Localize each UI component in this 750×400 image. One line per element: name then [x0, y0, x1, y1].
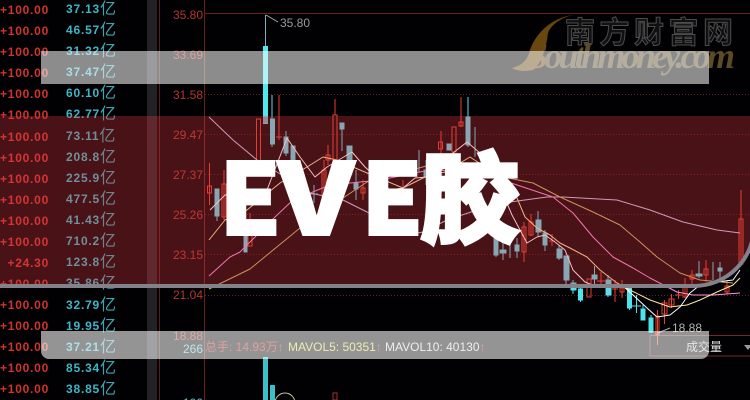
column: turnover list: 710.2亿 — [66, 227, 116, 251]
axis labels — [173, 8, 203, 343]
axis labels: 23.15 — [173, 248, 203, 262]
column: price change list: +100.00 — [0, 340, 49, 354]
column: price change list: +100.00 — [0, 193, 49, 207]
legend text on bottom band: 总手: 14.93万↑ — [205, 340, 284, 354]
column: price change list: +100.00 — [0, 130, 49, 144]
column: price change list: +100.00 — [0, 361, 49, 375]
column: price change list: +100.00 — [0, 151, 49, 165]
column: turnover list: 35.86亿 — [66, 269, 116, 293]
column: turnover list: 19.95亿 — [66, 312, 116, 336]
column: turnover list: 73.11亿 — [66, 122, 115, 146]
title: 胶 — [420, 120, 519, 264]
column: price change list: +100.00 — [0, 108, 49, 122]
column: turnover list: 123.8亿 — [66, 248, 116, 272]
title: E — [219, 120, 281, 264]
axis labels: 21.04 — [173, 288, 203, 302]
column: turnover list: 208.8亿 — [66, 143, 116, 167]
legend text on bottom band — [183, 340, 750, 356]
column: price change list: +100.00 — [0, 235, 49, 249]
column: price change list: +100.00 — [0, 45, 49, 59]
column: price change list: +100.00 — [0, 172, 49, 186]
column: price change list: +100.00 — [0, 214, 49, 228]
column: price change list: +100.00 — [0, 66, 49, 80]
volume bars — [183, 357, 337, 400]
axis labels: 29.47 — [173, 128, 203, 142]
low price marker: 18.88 — [672, 321, 702, 335]
column: price change list: +100.00 — [0, 277, 49, 291]
column: turnover list: 85.34亿 — [66, 354, 116, 378]
legend text on bottom band: MAVOL5: 50351↑ — [288, 340, 382, 354]
column: price change list: +100.00 — [0, 298, 49, 312]
axis labels: 33.69 — [173, 48, 203, 62]
column: turnover list: 62.77亿 — [66, 100, 116, 124]
title: V — [278, 120, 354, 264]
moving averages — [209, 117, 740, 317]
axis labels: 27.37 — [173, 168, 203, 182]
high price marker — [266, 15, 310, 30]
column: turnover list: 31.32亿 — [66, 37, 116, 61]
column: price change list: +100.00 — [0, 319, 49, 333]
low price marker — [658, 321, 702, 335]
legend text on bottom band: 266 — [183, 342, 203, 356]
column: price change list: +24.30 — [7, 256, 49, 270]
column: turnover list: 41.43亿 — [66, 206, 116, 230]
gray bottom band — [41, 331, 709, 359]
title: E — [361, 120, 423, 264]
watermark: Southmoney.com — [528, 36, 735, 76]
watermark — [512, 8, 735, 76]
bright candles below band — [571, 280, 653, 333]
axis labels: 35.80 — [173, 8, 203, 22]
axis labels: 25.26 — [173, 208, 203, 222]
red central band — [0, 116, 750, 288]
legend text on bottom band: 成交量 — [686, 340, 722, 354]
column: turnover list: 477.5亿 — [66, 185, 116, 209]
title — [219, 120, 522, 264]
column: turnover list: 37.21亿 — [66, 333, 116, 357]
red candles — [208, 95, 743, 345]
axis labels: 18.88 — [173, 329, 203, 343]
tall spike candle — [263, 15, 268, 124]
column: price change list: +100.00 — [0, 87, 49, 101]
column: turnover list: 37.47亿 — [66, 58, 116, 82]
column: price change list: +100.00 — [0, 3, 49, 17]
gray top band — [41, 51, 709, 84]
column: price change list: +100.00 — [0, 382, 49, 396]
column: turnover list: 46.57亿 — [66, 16, 116, 40]
watermark: 南方财富网 — [565, 8, 733, 52]
legend text on bottom band: MAVOL10: 40130↑ — [385, 340, 486, 354]
teal candles — [215, 95, 722, 297]
column: turnover list: 38.85亿 — [66, 375, 116, 399]
column: turnover list: 60.10亿 — [66, 79, 116, 103]
column: turnover list: 225.9亿 — [66, 164, 116, 188]
high price marker: 35.80 — [280, 16, 310, 30]
column: price change list: +100.00 — [0, 24, 49, 38]
column: turnover list: 32.79亿 — [66, 291, 116, 315]
axis labels: 31.58 — [173, 88, 203, 102]
